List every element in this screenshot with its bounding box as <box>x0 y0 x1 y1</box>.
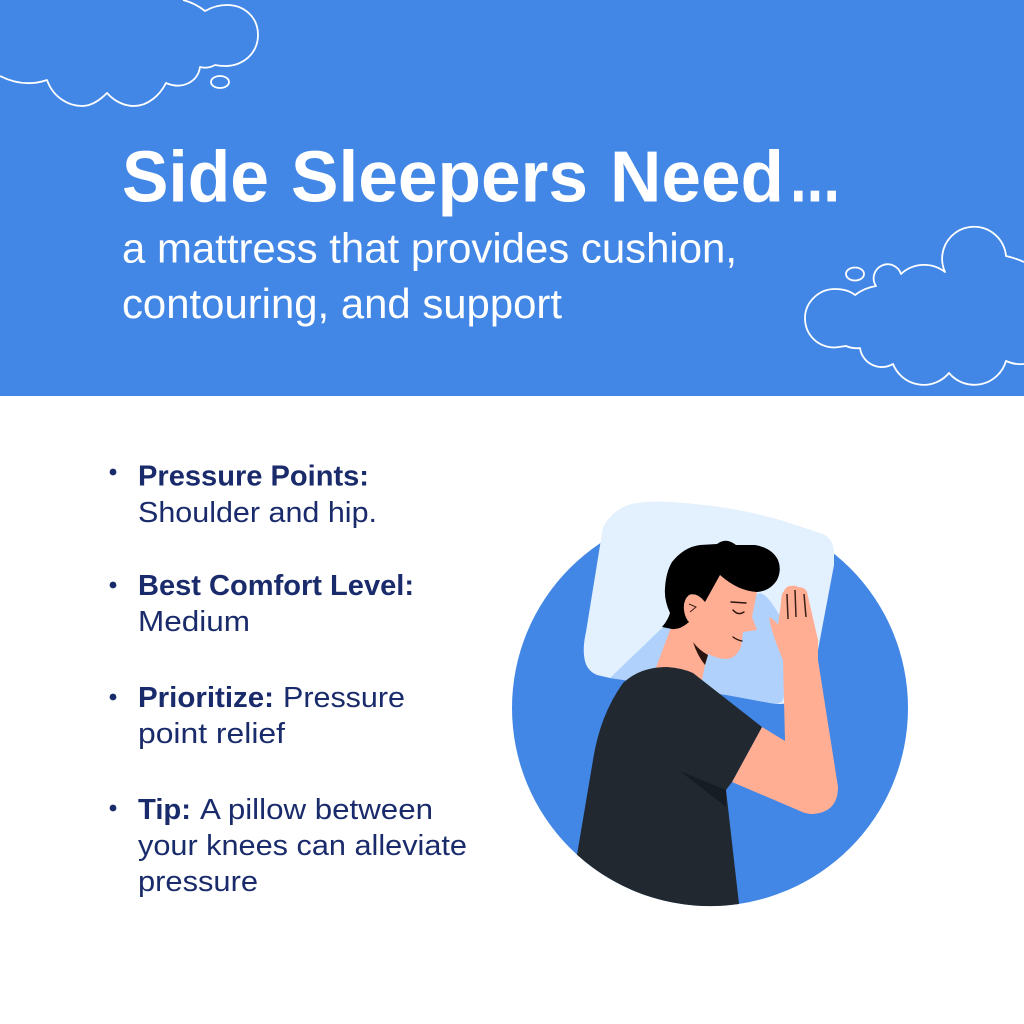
head and neck <box>655 575 757 680</box>
bullet: tip: your knees can alleviate <box>138 830 467 862</box>
bullet: prioritize: Pressure <box>283 682 405 714</box>
bullet: pressure points <box>110 460 377 529</box>
pillow shadow <box>610 593 800 704</box>
arm and hand <box>732 586 838 814</box>
bullet: best comfort level <box>110 570 414 638</box>
bullet: best comfort level: Best Comfort Level: <box>138 570 414 602</box>
shirt <box>577 667 762 906</box>
bullet: tip: A pillow between <box>200 794 433 826</box>
bullet: prioritize: point relief <box>138 718 286 750</box>
finger lines <box>787 590 806 619</box>
bullet: pressure points: Pressure Points: <box>138 460 369 492</box>
subtitle: contouring, and support <box>122 280 562 327</box>
title: Side <box>122 138 269 218</box>
face details <box>731 602 746 641</box>
bullet: tip: pressure <box>138 866 258 898</box>
bullet: prioritize <box>110 682 405 750</box>
pillow <box>584 502 834 704</box>
ear <box>684 594 705 622</box>
title <box>122 138 840 218</box>
title: Need <box>610 138 784 218</box>
shirt fold <box>680 771 726 807</box>
bullet: tip <box>110 794 467 898</box>
background circle <box>512 510 908 906</box>
bullet: pressure points: Shoulder and hip. <box>138 497 377 529</box>
illustration: side sleeper <box>512 502 908 906</box>
icon: right cloud outline <box>805 227 1024 385</box>
subtitle <box>122 224 737 327</box>
neck shadow <box>693 642 708 665</box>
bullet: tip: Tip: <box>138 794 191 826</box>
panel: header banner <box>0 0 1024 396</box>
hair <box>662 541 780 629</box>
title: Sleepers <box>291 138 588 218</box>
bullet: prioritize: Prioritize: <box>138 682 274 714</box>
bullet: best comfort level: Medium <box>138 606 250 638</box>
title: ... <box>790 138 840 218</box>
icon: top left cloud outline <box>0 0 258 106</box>
subtitle: a mattress that provides cushion, <box>122 224 737 272</box>
